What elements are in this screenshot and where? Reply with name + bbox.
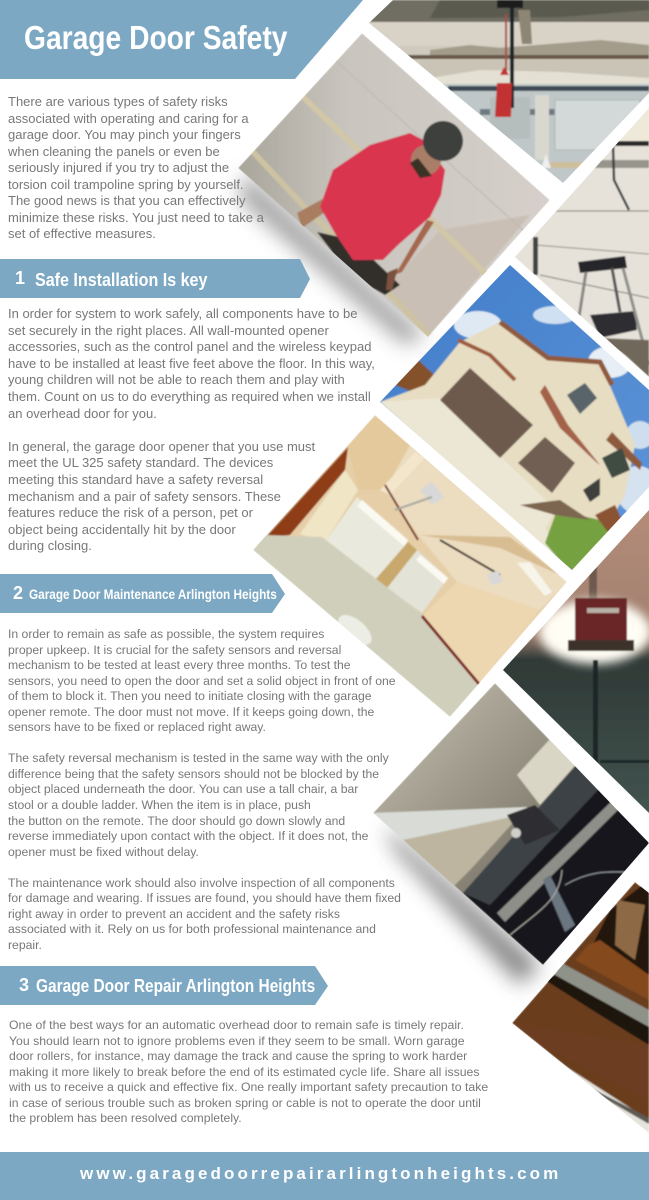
section 1 body bbox=[8, 306, 375, 553]
section 3 heading bbox=[0, 966, 328, 1005]
section 1 body: In general, the garage door opener that you use must bbox=[8, 439, 315, 454]
section 2 body: reverse immediately upon contact with the object. If it does not, the bbox=[8, 829, 368, 843]
section 2 body: of them to block it. Then you need to initiate closing with the garage bbox=[8, 689, 372, 703]
section 2 body: the button on the remote. The door should go down slowly and bbox=[8, 814, 345, 828]
section 3 number: 3 bbox=[19, 975, 29, 995]
section 3 body: making it more likely to break before the end of its estimated cycle life. Share all issues bbox=[9, 1065, 479, 1079]
intro paragraph: when cleaning the panels or even be bbox=[8, 144, 220, 159]
section 1 body: meeting this standard have a safety reversal bbox=[8, 472, 263, 487]
section 3 body: in case of serious trouble such as broken spring or cable is not to operate the door until bbox=[9, 1096, 481, 1110]
section 2 body: right away in order to prevent an accident and the safety risks bbox=[8, 907, 340, 921]
section 1 body: an overhead door for you. bbox=[8, 406, 157, 421]
intro paragraph: The good news is that you can effectively bbox=[8, 193, 246, 208]
website address: www.garagedoorrepairarlingtonheights.com bbox=[80, 1164, 561, 1183]
section 2 body: proper upkeep. It is crucial for the safety sensors and reversal bbox=[8, 643, 341, 657]
photo collage bbox=[230, 0, 649, 1132]
section 1 body: In order for system to work safely, all components have to be bbox=[8, 306, 357, 321]
section 2 title: Garage Door Maintenance Arlington Heights bbox=[29, 587, 277, 602]
intro paragraph: seriously injured if you try to adjust the bbox=[8, 160, 229, 175]
section 2 body: object placed underneath the door. You can use a tall chair, a bar bbox=[8, 782, 358, 796]
section 2 body: mechanism to be tested at least every three months. To test the bbox=[8, 658, 351, 672]
section 2 body: stool or a double ladder. When the item is in place, push bbox=[8, 798, 311, 812]
section 2 number: 2 bbox=[13, 583, 23, 603]
section 1 body: object being accidentally hit by the door bbox=[8, 522, 236, 537]
section 2 body: sensors, you need to open the door and set a solid object in front of one bbox=[8, 674, 396, 688]
intro paragraph: garage door. You may pinch your fingers bbox=[8, 127, 241, 142]
photo: opener hanging from ceiling bbox=[360, 0, 649, 190]
section 1 title: Safe Installation Is key bbox=[35, 270, 207, 290]
section 2 body bbox=[8, 627, 401, 952]
section 1 heading bbox=[0, 259, 310, 298]
section 2 body: associated with it. Rely on us for both professional maintenance and bbox=[8, 922, 376, 936]
section 2 body: In order to remain as safe as possible, the system requires bbox=[8, 627, 324, 641]
photo: garage door with step ladder bbox=[510, 100, 649, 380]
section 3 title: Garage Door Repair Arlington Heights bbox=[36, 976, 315, 996]
section 1 body: set securely in the right places. All wall-mounted opener bbox=[8, 323, 329, 338]
photo: empty garage interior with two doors bbox=[253, 415, 567, 717]
section 2 body: for damage and wearing. If issues are found, you should have them fixed bbox=[8, 891, 401, 905]
section 1 body: young children will not be able to reach them and play with bbox=[8, 372, 345, 387]
intro paragraph: torsion coil trampoline spring by yourself. bbox=[8, 177, 244, 192]
section 3 body bbox=[9, 1018, 488, 1125]
intro paragraph bbox=[8, 94, 264, 241]
section 3 body: the problem has been resolved completely. bbox=[9, 1111, 242, 1125]
photo: wood beam with torsion spring bbox=[512, 880, 649, 1133]
section 1 body: them. Count on us to do everything as required when we install bbox=[8, 389, 371, 404]
title banner bbox=[0, 0, 364, 79]
photo: opener motor with lit lamp bbox=[500, 505, 649, 815]
section 3 body: One of the best ways for an automatic overhead door to remain safe is timely repair. bbox=[9, 1018, 464, 1032]
photo: technician in red shirt bbox=[238, 33, 550, 339]
section 2 body: difference being that the safety sensors should not be blocked by the bbox=[8, 767, 379, 781]
footer bar with website bbox=[0, 1152, 649, 1200]
intro paragraph: associated with operating and caring for a bbox=[8, 111, 249, 126]
photo: door track bracket close-up bbox=[373, 683, 649, 965]
section 1 body: features reduce the risk of a person, pet or bbox=[8, 505, 253, 520]
section 1 body: mechanism and a pair of safety sensors. These bbox=[8, 489, 281, 504]
section 2 body: repair. bbox=[8, 938, 42, 952]
section 2 body: opener remote. The door must not move. If it keeps going down, the bbox=[8, 705, 374, 719]
section 1 body: have to be installed at least five feet above the floor. In this way, bbox=[8, 356, 375, 371]
section 1 body: accessories, such as the control panel and the wireless keypad bbox=[8, 339, 371, 354]
section 1 body: meet the UL 325 safety standard. The devices bbox=[8, 455, 273, 470]
intro paragraph: set of effective measures. bbox=[8, 226, 156, 241]
section 2 heading bbox=[0, 574, 285, 613]
section 2 body: The safety reversal mechanism is tested in the same way with the only bbox=[8, 751, 389, 765]
section 2 body: sensors have to be fixed or replaced right away. bbox=[8, 720, 266, 734]
section 3 body: door rollers, for instance, may damage the track and cause the spring to work harder bbox=[9, 1049, 467, 1063]
section 2 body: The maintenance work should also involve inspection of all components bbox=[8, 876, 395, 890]
intro paragraph: There are various types of safety risks bbox=[8, 94, 228, 109]
section 1 body: during closing. bbox=[8, 538, 92, 553]
section 3 body: You should learn not to ignore problems even if they seem to be small. Worn garage bbox=[9, 1034, 465, 1048]
title: Garage Door Safety bbox=[24, 19, 287, 56]
intro paragraph: minimize these risks. You just need to take a bbox=[8, 210, 264, 225]
section 2 body: opener must be fixed without delay. bbox=[8, 845, 199, 859]
drop shadows behind photos bbox=[240, 172, 540, 985]
photo: house exterior with garage doors bbox=[375, 260, 649, 575]
section 3 body: with us to receive a quick and effective fix. One really important safety precaution to take bbox=[9, 1080, 488, 1094]
section 1 number: 1 bbox=[15, 268, 25, 288]
